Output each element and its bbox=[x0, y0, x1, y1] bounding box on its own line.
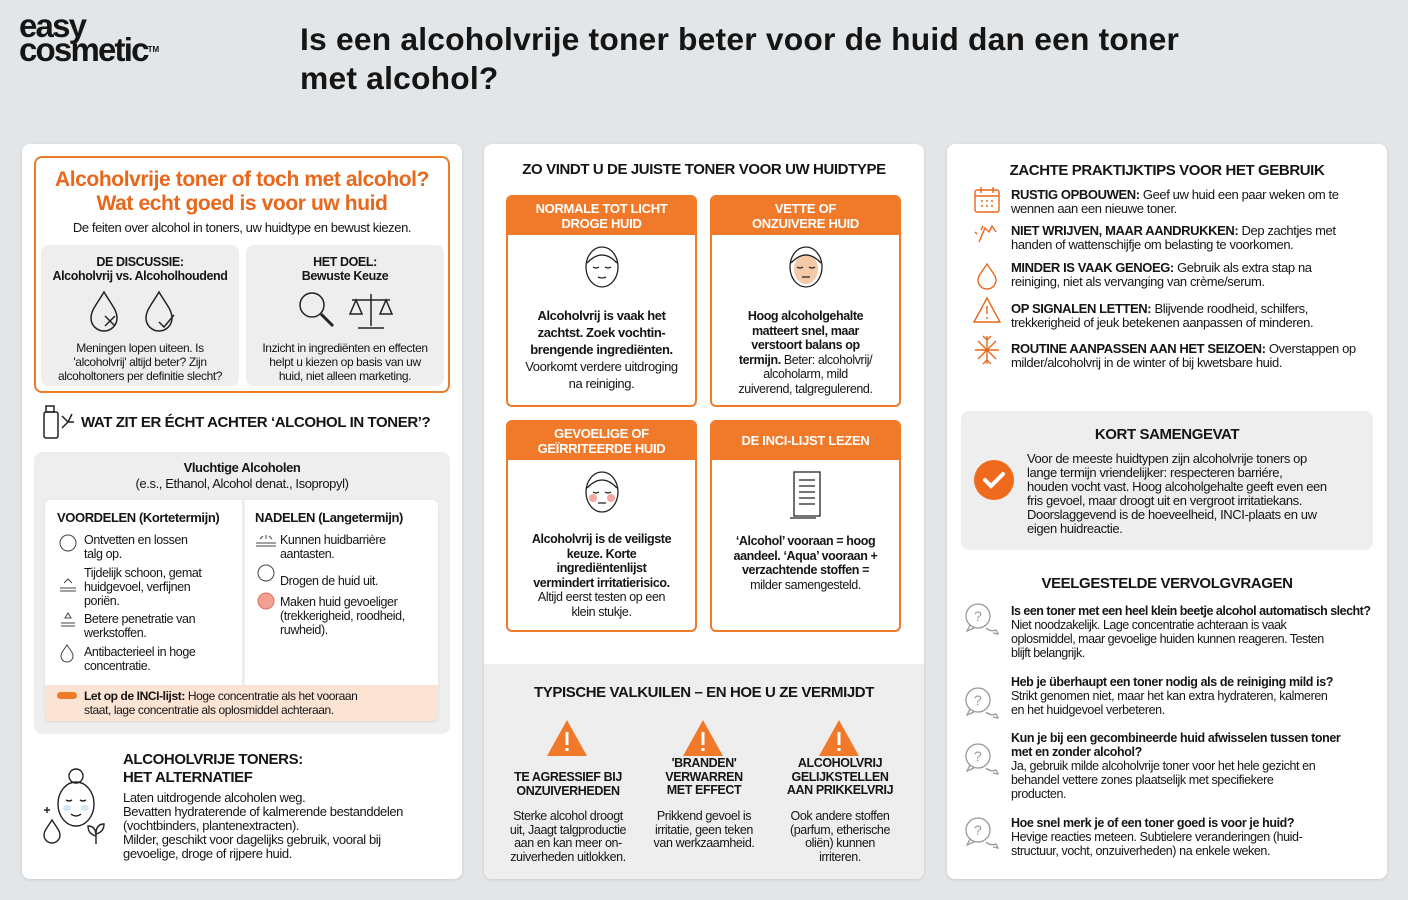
card: gevoelig: Alcoholvrij is de veiligste bbox=[532, 532, 671, 546]
panel: left bbox=[22, 144, 462, 879]
panel: right: Is een toner met een heel klein beetje alcohol automatisch slecht? bbox=[1011, 604, 1370, 618]
list: nadelen: (trekkerigheid, roodheid, bbox=[280, 609, 405, 623]
list: voordelen: Tijdelijk schoon, gemat bbox=[84, 566, 201, 580]
panel: right: oplosmiddel, maar gevoelige huiden kunnen reageren. Testen bbox=[1011, 632, 1324, 646]
list: voordelen: poriën. bbox=[84, 594, 119, 608]
list: voordelen bbox=[57, 510, 220, 673]
panel: right: reiniging, niet als vervanging van crème/serum. bbox=[1011, 274, 1265, 289]
section: valkuilen: uit, Jaagt talgproductie bbox=[510, 822, 626, 836]
section: valkuilen: zuiverheden uitlokken. bbox=[510, 850, 626, 864]
card: vet: termijn. Beter: alcoholvrij/ bbox=[739, 352, 872, 366]
box: doel: HET DOEL: bbox=[313, 255, 377, 269]
card: normaal bbox=[506, 195, 697, 407]
section: valkuilen: TE AGRESSIEF BIJ bbox=[514, 770, 622, 784]
card: gevoelig: ingrediëntenlijst bbox=[557, 561, 646, 575]
card: gevoelig: GEÏRRITEERDE HUID bbox=[538, 441, 665, 456]
box: discussie: DE DISCUSSIE: bbox=[96, 255, 184, 269]
icons: faq bbox=[965, 603, 1000, 849]
panel: right: structuur, vocht, onzuiverheden) na enkele weken. bbox=[1011, 844, 1270, 858]
callout: INCI: staat, lage concentratie als oplosmiddel achteraan. bbox=[84, 703, 334, 717]
icon: check bbox=[974, 460, 1014, 500]
card: normaal: NORMALE TOT LICHT bbox=[536, 201, 667, 216]
section: valkuilen: ALCOHOLVRIJ bbox=[798, 756, 882, 770]
icons: warnings bbox=[547, 720, 859, 756]
card: inci: milder samengesteld. bbox=[750, 578, 861, 592]
callout: INCI: Let op de INCI-lijst: Hoge concentratie als het vooraan bbox=[84, 689, 357, 703]
panel: right: Strikt genomen niet, maar het kan extra hydrateren, kalmeren bbox=[1011, 689, 1327, 703]
panel: right: blijft belangrijk. bbox=[1011, 646, 1085, 660]
panel: right: behandel vettere zones plaatselijk met specifiekere bbox=[1011, 773, 1273, 787]
box: samengevat: Doorslaggevend is de hoeveelheid, INCI-plaats en uw bbox=[1027, 507, 1317, 522]
card: vet: ONZUIVERE HUID bbox=[752, 216, 859, 231]
box: discussie bbox=[41, 245, 239, 386]
card: inci: verzachtende stoffen = bbox=[742, 563, 869, 577]
card: inci: aandeel. ‘Aqua’ vooraan + bbox=[734, 548, 877, 562]
box: discussie: 'alcoholvrij' altijd beter? Zijn bbox=[73, 355, 207, 369]
card: gevoelig: Altijd eerst testen op een bbox=[538, 590, 665, 604]
box: doel: Inzicht in ingrediënten en effecten bbox=[262, 341, 428, 355]
section: valkuilen: AAN PRIKKELVRIJ bbox=[787, 783, 893, 797]
panel: right: Kun je bij een gecombineerde huid afwisselen tussen toner bbox=[1011, 731, 1340, 745]
card: normaal: DROGE HUID bbox=[561, 216, 642, 231]
section: alternatief: Bevatten hydraterende of kalmerende bestanddelen bbox=[123, 804, 403, 819]
intro heading bbox=[55, 168, 429, 215]
logo bbox=[19, 7, 159, 68]
list: voordelen: talg op. bbox=[84, 547, 122, 561]
section: valkuilen: GELIJKSTELLEN bbox=[792, 770, 888, 784]
list: nadelen: NADELEN (Langetermijn) bbox=[255, 510, 403, 525]
section: valkuilen: irritatie, geen teken bbox=[655, 822, 753, 836]
section: valkuilen: Prikkend gevoel is bbox=[657, 809, 751, 823]
card: normaal: brengende ingrediënten. bbox=[530, 342, 673, 357]
panel: right: trekkerigheid of jeuk betekenen aanpassen of minderen. bbox=[1011, 315, 1313, 330]
list: voordelen: concentratie. bbox=[84, 659, 150, 673]
heading: wat zit er: WAT ZIT ER ÉCHT ACHTER ‘ALCOHOL IN TONER’? bbox=[81, 414, 430, 431]
panel: right bbox=[947, 144, 1387, 879]
box: samengevat bbox=[961, 411, 1373, 550]
icons: faq: ? bbox=[974, 608, 982, 624]
list: nadelen: aantasten. bbox=[280, 547, 334, 561]
panel: right: Hevige reacties meteen. Subtielere veranderingen (huid- bbox=[1011, 830, 1302, 844]
list: voordelen: huidgevoel, verfijnen bbox=[84, 580, 190, 594]
card: gevoelig bbox=[506, 420, 697, 632]
list: nadelen bbox=[255, 510, 405, 637]
section: alternatief: Milder, geschikt voor dagelijks gebruik, vooral bij bbox=[123, 832, 381, 847]
box: doel: huid, niet alleen marketing. bbox=[279, 369, 411, 383]
list: nadelen: Kunnen huidbarrière bbox=[280, 533, 386, 547]
section: valkuilen: ONZUIVERHEDEN bbox=[516, 784, 620, 798]
section: valkuilen: Ook andere stoffen bbox=[791, 809, 889, 823]
section: valkuilen: Sterke alcohol droogt bbox=[513, 809, 623, 823]
card: vet: zuiverend, talgregulerend. bbox=[738, 382, 873, 396]
section: alternatief: HET ALTERNATIEF bbox=[123, 769, 253, 786]
box: samengevat: fris gevoel, maar droogt uit en vergroot irritatiekans. bbox=[1027, 493, 1302, 508]
box: vluchtige alcoholen: Vluchtige Alcoholen bbox=[184, 460, 300, 475]
box: doel: helpt u kiezen op basis van uw bbox=[269, 355, 421, 369]
box: samengevat: eigen huidreactie. bbox=[1027, 521, 1122, 536]
panel: right: Hoe snel merk je of een toner goed is voor je huid? bbox=[1011, 816, 1294, 830]
card: vet: matteert snel, maar bbox=[752, 324, 859, 338]
section: alternatief: ALCOHOLVRIJE TONERS: bbox=[123, 751, 303, 768]
box: samengevat: Voor de meeste huidtypen zijn alcoholvrije toners op bbox=[1027, 451, 1307, 466]
section: alternatief: gevoelige, droge of rijpere huid. bbox=[123, 846, 292, 861]
list: voordelen: Ontvetten en lossen bbox=[84, 533, 188, 547]
panel: right: Ja, gebruik milde alcoholvrije toner voor het hele gezicht en bbox=[1011, 759, 1315, 773]
box: doel: Bewuste Keuze bbox=[302, 269, 388, 283]
card: normaal: Voorkomt verdere uitdroging bbox=[525, 359, 678, 374]
card: vet bbox=[710, 195, 901, 407]
list: nadelen: Maken huid gevoeliger bbox=[280, 595, 397, 609]
panel: right: OP SIGNALEN LETTEN: Blijvende roodheid, schilfers, bbox=[1011, 301, 1308, 316]
section: valkuilen: TYPISCHE VALKUILEN – EN HOE U ZE VERMIJDT bbox=[534, 684, 874, 701]
box: samengevat: lange termijn vriendelijker: respecteren barriére, bbox=[1027, 465, 1282, 480]
title: Is een alcoholvrije toner beter voor de huid dan een toner bbox=[300, 21, 1179, 57]
section: valkuilen: oliën) kunnen bbox=[805, 836, 875, 850]
card: normaal: Alcoholvrij is vaak het bbox=[537, 308, 666, 323]
panel: right: MINDER IS VAAK GENOEG: Gebruik als extra stap na bbox=[1011, 260, 1312, 275]
panel: right: met en zonder alcohol? bbox=[1011, 745, 1142, 759]
box: vluchtige alcoholen bbox=[34, 452, 450, 734]
intro heading: Alcoholvrije toner of toch met alcohol? bbox=[55, 168, 429, 191]
intro subtitle: De feiten over alcohol in toners, uw huidtype en bewust kiezen. bbox=[73, 220, 411, 235]
section: valkuilen bbox=[484, 664, 924, 879]
icon: face bbox=[43, 768, 105, 844]
section: valkuilen: VERWARREN bbox=[665, 770, 743, 784]
panel: right: Niet noodzakelijk. Lage concentratie achteraan is vaak bbox=[1011, 618, 1286, 632]
card: inci: ‘Alcohol’ vooraan = hoog bbox=[736, 534, 875, 548]
icon: bottle bbox=[43, 405, 74, 439]
icons: tips bbox=[973, 187, 1002, 364]
box: vluchtige alcoholen: (e.s., Ethanol, Alcohol denat., Isopropyl) bbox=[136, 476, 348, 491]
callout: INCI bbox=[45, 685, 438, 721]
logo: easy bbox=[19, 7, 85, 44]
card: normaal: na reiniging. bbox=[569, 376, 634, 391]
panel: right: ROUTINE AANPASSEN AAN HET SEIZOEN: Overstappen op bbox=[1011, 341, 1356, 356]
panel: right: Heb je überhaupt een toner nodig als de reiniging mild is? bbox=[1011, 675, 1333, 689]
card: vet: verstoort balans op bbox=[751, 338, 860, 352]
box: discussie: Alcoholvrij vs. Alcoholhoudend bbox=[52, 269, 228, 283]
card: gevoelig: vermindert irritatierisico. bbox=[533, 576, 670, 590]
section: valkuilen: 'BRANDEN' bbox=[672, 756, 736, 770]
card: inci bbox=[710, 420, 901, 632]
section: valkuilen: van werkzaamheid. bbox=[654, 836, 754, 850]
logo: cosmeticTM bbox=[19, 31, 159, 68]
panel: middle bbox=[484, 144, 924, 879]
panel: right: producten. bbox=[1011, 787, 1066, 801]
panel: right: RUSTIG OPBOUWEN: Geef uw huid een paar weken om te bbox=[1011, 187, 1339, 202]
title bbox=[300, 21, 1179, 96]
list: voordelen: Antibacterieel in hoge bbox=[84, 645, 195, 659]
card: vet: VETTE OF bbox=[775, 201, 836, 216]
box: doel bbox=[246, 245, 444, 386]
card: gevoelig: keuze. Korte bbox=[567, 546, 636, 560]
card: vet: alcoholarm, mild bbox=[763, 367, 848, 381]
list: nadelen: Drogen de huid uit. bbox=[280, 574, 378, 588]
panel: right: NIET WRIJVEN, MAAR AANDRUKKEN: Dep zachtjes met bbox=[1011, 223, 1336, 238]
box: samengevat: houden vocht vast. Hoog alcoholgehalte geeft even een bbox=[1027, 479, 1327, 494]
section: valkuilen: MET EFFECT bbox=[667, 783, 741, 797]
heading: faq: VEELGESTELDE VERVOLGVRAGEN bbox=[1041, 575, 1293, 592]
title: met alcohol? bbox=[300, 60, 499, 96]
card: inci: DE INCI-LIJST LEZEN bbox=[742, 433, 869, 448]
list: nadelen: ruwheid). bbox=[280, 623, 328, 637]
icon: drops bbox=[90, 290, 174, 332]
icon: magnifier and scale bbox=[299, 292, 394, 329]
heading: tips: ZACHTE PRAKTIJKTIPS VOOR HET GEBRUIK bbox=[1010, 162, 1324, 179]
section: valkuilen: aan en kan meer on- bbox=[514, 836, 622, 850]
list: voordelen: VOORDELEN (Kortetermijn) bbox=[57, 510, 219, 525]
intro heading: Wat echt goed is voor uw huid bbox=[97, 192, 387, 215]
card: normaal: zachtst. Zoek vochtin- bbox=[538, 325, 665, 340]
intro box bbox=[34, 156, 450, 393]
panel: right: handen of wattenschijfje om belasting te voorkomen. bbox=[1011, 237, 1293, 252]
panel: right: milder/alcoholvrij in de winter of bij kwetsbare huid. bbox=[1011, 355, 1282, 370]
section: alternatief bbox=[123, 751, 403, 861]
panel: right: en het huidgevoel verbeteren. bbox=[1011, 703, 1165, 717]
list: voordelen: werkstoffen. bbox=[84, 626, 146, 640]
card: vet: Hoog alcoholgehalte bbox=[748, 309, 863, 323]
card: gevoelig: GEVOELIGE OF bbox=[554, 426, 649, 441]
card: gevoelig: klein stukje. bbox=[571, 604, 632, 618]
box: discussie: alcoholtoners per definitie slecht? bbox=[58, 369, 222, 383]
section: valkuilen: irriteren. bbox=[819, 850, 861, 864]
list: voordelen: Betere penetratie van bbox=[84, 612, 195, 626]
section: alternatief: (vochtbinders, plantenextracten). bbox=[123, 818, 299, 833]
box: samengevat: KORT SAMENGEVAT bbox=[1095, 426, 1239, 443]
section: alternatief: Laten uitdrogende alcoholen weg. bbox=[123, 790, 305, 805]
heading: huidtype: ZO VINDT U DE JUISTE TONER VOOR UW HUIDTYPE bbox=[522, 161, 886, 178]
box: discussie: Meningen lopen uiteen. Is bbox=[76, 341, 204, 355]
panel: right: wennen aan een nieuwe toner. bbox=[1011, 201, 1177, 216]
section: valkuilen: (parfum, etherische bbox=[790, 822, 890, 836]
